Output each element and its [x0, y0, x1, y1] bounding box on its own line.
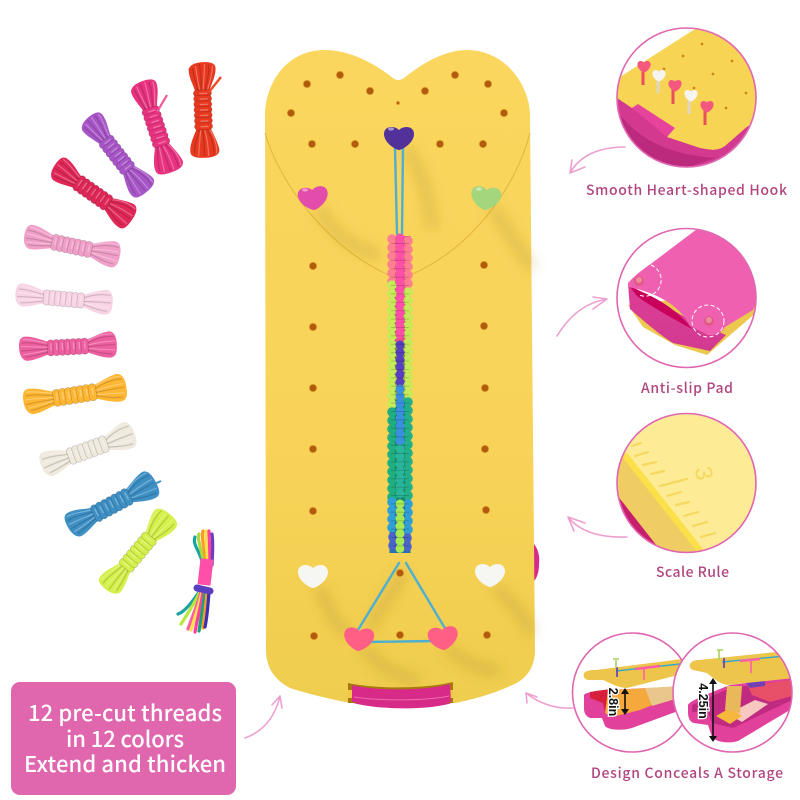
inset: open storage — [673, 633, 795, 752]
arrow: hook inset — [570, 147, 625, 173]
thread: crimson — [47, 154, 140, 231]
thread: blue — [61, 469, 162, 541]
heart peg: pink — [297, 185, 329, 211]
thread: orange — [21, 373, 128, 416]
thread: pale pink — [14, 282, 114, 315]
blue thread loops — [358, 148, 446, 642]
heart peg: purple — [384, 127, 414, 150]
callout: 12 pre-cut threads — [11, 682, 236, 795]
label: Design Conceals A Storage: Design Conceals A Storage — [591, 763, 783, 783]
label: Smooth Heart-shaped Hook: Smooth Heart-shaped Hook — [586, 180, 787, 200]
peg shadows — [320, 150, 530, 680]
heart peg: coral right — [427, 625, 459, 651]
arrow: rule inset — [568, 517, 627, 537]
peg holes — [287, 71, 508, 640]
label: Scale Rule: Scale Rule — [656, 562, 729, 582]
thread: rainbow — [178, 531, 213, 632]
right column beads — [407, 241, 408, 552]
callout: 12 pre-cut threads: 12 pre-cut threads — [28, 696, 222, 728]
knot separators — [391, 243, 409, 553]
heart crease line — [265, 133, 530, 276]
thread: white — [37, 420, 139, 480]
thread: magenta — [128, 77, 185, 177]
thread: lime — [95, 505, 180, 598]
centre column beads — [396, 238, 404, 553]
arrow: pad inset — [557, 297, 607, 336]
label: Anti-slip Pad: Anti-slip Pad — [641, 378, 733, 398]
storage tray peeking from the side — [533, 543, 539, 581]
inset: heart-shaped hook — [617, 28, 757, 170]
heart peg: coral left — [343, 627, 375, 652]
heart peg: white right — [475, 564, 505, 587]
thread: light pink — [22, 223, 123, 269]
inset: anti-slip pad — [617, 228, 757, 368]
heart peg: white left — [298, 565, 328, 588]
board: yellow heart-shaped loom — [265, 50, 539, 708]
inset: closed storage — [572, 633, 692, 753]
left column beads — [392, 239, 393, 552]
callout: 12 pre-cut threads: in 12 colors — [66, 722, 184, 754]
thread: hot pink — [18, 331, 117, 362]
inset: scale rule — [617, 413, 757, 553]
thread: purple — [77, 109, 157, 201]
callout: 12 pre-cut threads: Extend and thicken — [24, 747, 226, 779]
arrow: callout to board — [245, 696, 282, 738]
inset: open storage: 4.25in — [696, 683, 710, 719]
heart peg: green — [470, 185, 502, 211]
inset: closed storage: 2.8in — [606, 688, 620, 716]
braid backing — [390, 236, 410, 553]
lower tray lip — [350, 702, 455, 708]
pins — [643, 68, 705, 125]
bracelet: rainbow braid — [392, 236, 408, 553]
thread: red — [187, 62, 221, 158]
arrow: storage inset — [526, 693, 573, 708]
inset: scale rule: 3 — [689, 464, 718, 483]
bottom latch — [348, 682, 453, 705]
